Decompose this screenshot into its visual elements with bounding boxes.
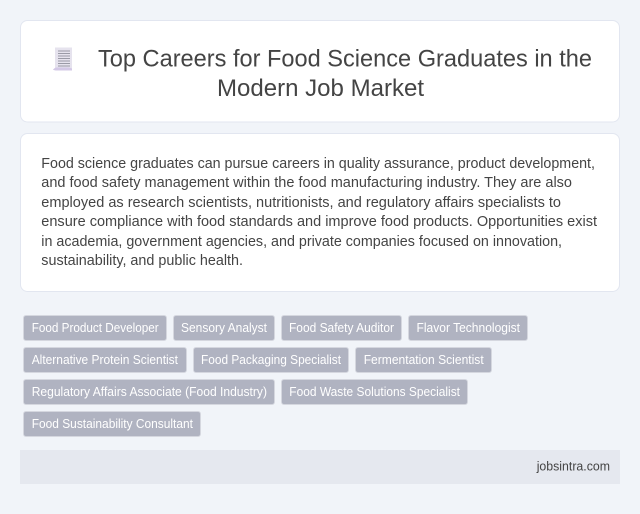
tag: Food Product Developer xyxy=(24,316,166,340)
tag: Regulatory Affairs Associate (Food Industry): Regulatory Affairs Associate (Food Industry) xyxy=(32,385,267,399)
title: Top Careers for Food Science Graduates in the xyxy=(98,46,592,72)
tag: Alternative Protein Scientist xyxy=(24,348,186,372)
panel: summary xyxy=(20,134,620,292)
tag: Alternative Protein Scientist: Alternative Protein Scientist xyxy=(32,353,178,367)
footer source text: jobsintra.com xyxy=(536,460,610,474)
text block: summary paragraph: Food science graduates can pursue careers in quality assurance, product development, xyxy=(41,156,595,172)
title xyxy=(98,46,592,102)
tag: Food Waste Solutions Specialist xyxy=(282,380,468,404)
text block: summary paragraph: ensure compliance with food standards and improve food products. Opportunities exist xyxy=(41,214,597,230)
tag: Food Safety Auditor xyxy=(282,316,402,340)
tag: Food Product Developer: Food Product Developer xyxy=(32,321,159,335)
text block: summary paragraph: and food safety management within the food manufacturing industry. They are also xyxy=(41,175,572,191)
tag: Flavor Technologist: Flavor Technologist xyxy=(416,321,521,335)
tag: Food Safety Auditor: Food Safety Auditor xyxy=(289,321,394,335)
footer xyxy=(20,450,620,484)
tag: Sensory Analyst xyxy=(174,316,274,340)
text block: summary paragraph: employed as research scientists, nutritionists, and regulatory affairs specialists to xyxy=(41,195,561,211)
tag: Regulatory Affairs Associate (Food Industry) xyxy=(24,380,274,404)
title: Modern Job Market xyxy=(217,75,424,102)
icon: document xyxy=(53,48,72,70)
text block: summary paragraph: sustainability, and public health. xyxy=(41,253,243,269)
tag: Food Sustainability Consultant: Food Sustainability Consultant xyxy=(32,417,193,431)
tag: Food Packaging Specialist: Food Packaging Specialist xyxy=(201,353,341,367)
panel: header xyxy=(20,20,620,122)
tag: Sensory Analyst: Sensory Analyst xyxy=(181,321,267,335)
text block: summary paragraph xyxy=(41,156,597,269)
tag: Food Sustainability Consultant xyxy=(24,412,200,436)
tag: Flavor Technologist xyxy=(408,316,528,340)
tag: Fermentation Scientist xyxy=(356,348,492,372)
tag: Food Waste Solutions Specialist: Food Waste Solutions Specialist xyxy=(289,385,460,399)
tag: Fermentation Scientist: Fermentation Scientist xyxy=(364,353,484,367)
text block: summary paragraph: in academia, government agencies, and private companies focused on innovation, xyxy=(41,234,562,250)
career tags xyxy=(24,316,528,436)
tag: Food Packaging Specialist xyxy=(194,348,348,372)
